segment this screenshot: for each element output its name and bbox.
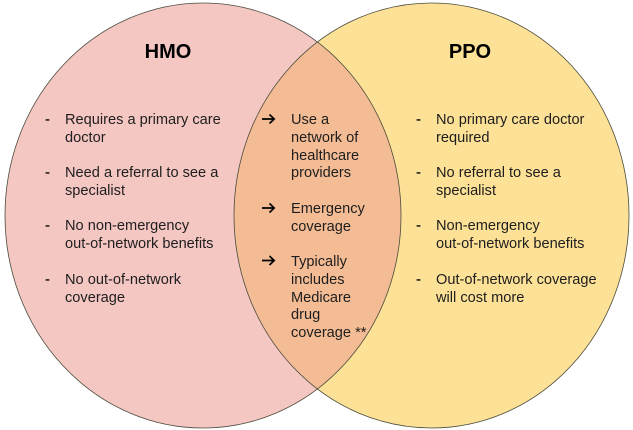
text block: HMO list: No out-of-network	[65, 272, 182, 288]
text block: PPO list: -	[416, 217, 421, 234]
venn circle: HMO	[5, 3, 401, 428]
icon: arrow 2	[262, 204, 274, 212]
text block: shared list: Emergency	[291, 201, 366, 217]
text block: HMO list: -	[45, 164, 50, 181]
text block: shared list: providers	[291, 165, 351, 181]
venn overlap region	[234, 42, 400, 388]
text block: PPO list	[416, 111, 597, 306]
text block: HMO list: Need a referral to see a	[65, 165, 219, 181]
venn circle: PPO	[234, 3, 629, 428]
text block: PPO list: will cost more	[435, 290, 524, 306]
text block: shared list: coverage **	[291, 325, 367, 341]
text block: shared list: Typically	[291, 254, 348, 270]
text block: shared list: Medicare	[291, 290, 351, 306]
text block: PPO list: out-of-network benefits	[436, 236, 584, 252]
text block: HMO list: -	[45, 217, 50, 234]
text block: shared list: drug	[291, 307, 320, 323]
text block: PPO list: Out-of-network coverage	[436, 272, 597, 288]
icon: arrow 1	[262, 114, 274, 124]
text block: PPO list: No referral to see a	[436, 165, 562, 181]
text block: HMO list: Requires a primary care	[65, 112, 221, 128]
text block: HMO list	[45, 111, 221, 306]
text block: PPO list: No primary care doctor	[436, 112, 585, 128]
text block: PPO list: -	[416, 271, 421, 288]
text block: HMO list: No non-emergency	[65, 218, 190, 234]
heading: HMO: HMO	[145, 41, 191, 63]
text block: shared list: includes	[291, 272, 345, 288]
text block: shared list: Use a	[291, 112, 330, 128]
text block: HMO list: -	[45, 111, 50, 128]
text block: shared list: healthcare	[291, 148, 359, 164]
heading: PPO: PPO	[449, 41, 491, 63]
text block: PPO list: -	[416, 111, 421, 128]
text block: HMO list: out-of-network benefits	[65, 236, 213, 252]
text block: PPO list: specialist	[436, 183, 496, 199]
text block: PPO list: Non-emergency	[436, 218, 541, 234]
text block: PPO list: -	[416, 164, 421, 181]
text block: HMO list: specialist	[65, 183, 125, 199]
text block: HMO list: coverage	[65, 290, 125, 306]
text block: shared list: coverage	[291, 219, 351, 235]
icon: arrow 3	[262, 256, 274, 265]
text block: HMO list: -	[45, 271, 50, 288]
text block: shared list: network of	[291, 130, 359, 146]
text block: PPO list: required	[436, 130, 490, 146]
text block: HMO list: doctor	[65, 130, 106, 146]
text block: shared list	[262, 112, 367, 341]
